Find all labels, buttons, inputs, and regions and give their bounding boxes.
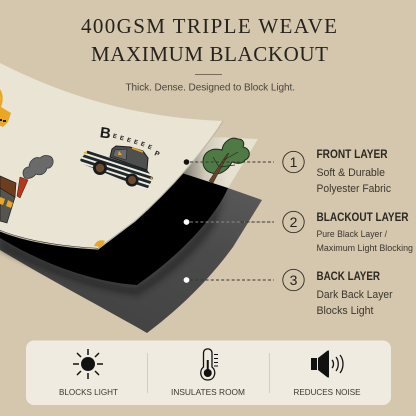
tree fabric swatch	[182, 137, 258, 188]
title	[81, 14, 337, 66]
number badge 2: 2	[290, 214, 298, 230]
car sound text: E	[133, 139, 139, 146]
front layer edge	[0, 121, 223, 249]
front layer sheet	[0, 63, 223, 248]
icon: sun	[73, 349, 103, 379]
title: MAXIMUM BLACKOUT	[91, 42, 328, 66]
fabric pattern	[0, 88, 161, 247]
front layer text: FRONT LAYER	[316, 147, 388, 161]
layered fabric illustration	[0, 63, 262, 333]
icon: striped car	[80, 146, 153, 190]
car sound text: E	[126, 137, 132, 144]
car sound text: E	[140, 141, 146, 148]
panel: benefits	[26, 340, 391, 405]
icon: tree	[203, 138, 249, 183]
number badge 1	[283, 151, 304, 173]
car sound text: E	[112, 134, 117, 140]
car sound text: P	[153, 150, 161, 159]
label: reduces noise: REDUCES NOISE	[294, 387, 361, 397]
icon: thermometer	[201, 349, 218, 380]
shadow under blackout layer	[0, 192, 226, 296]
title: 400GSM TRIPLE WEAVE	[81, 14, 337, 38]
blackout layer text: Maximum Light Blocking	[316, 243, 413, 253]
back layer text: BACK LAYER	[316, 269, 380, 283]
subtitle: Thick. Dense. Designed to Block Light.	[126, 82, 295, 94]
blackout layer sheet	[0, 173, 228, 285]
icon: house	[0, 156, 53, 223]
icon: yellow fragment	[94, 240, 105, 247]
car sound text: E	[147, 144, 153, 151]
label: blocks light: BLOCKS LIGHT	[59, 387, 118, 397]
icon: speaker	[311, 350, 343, 378]
front layer text	[316, 147, 391, 195]
back layer text: Blocks Light	[316, 305, 374, 317]
icon: yellow taxi fragment	[0, 88, 11, 127]
number badge 1: 1	[290, 154, 298, 170]
leader line 3	[184, 277, 274, 283]
back layer sheet	[0, 188, 262, 333]
car sound text: E	[119, 136, 124, 142]
leader line 2	[184, 219, 274, 225]
label: insulates room: INSULATES ROOM	[171, 387, 245, 397]
car sound text: B	[99, 124, 112, 143]
back layer text: Dark Back Layer	[316, 289, 393, 301]
blackout layer text: Pure Black Layer /	[316, 229, 387, 239]
blackout layer text	[316, 210, 413, 253]
number badge 3: 3	[290, 272, 298, 288]
car sound text	[100, 127, 160, 156]
number badge 3	[283, 269, 304, 291]
leader line 1	[184, 159, 274, 165]
front layer text: Polyester Fabric	[316, 183, 391, 195]
number badge 2	[283, 211, 304, 233]
front layer text: Soft & Durable	[316, 167, 385, 179]
back layer text	[316, 269, 393, 317]
